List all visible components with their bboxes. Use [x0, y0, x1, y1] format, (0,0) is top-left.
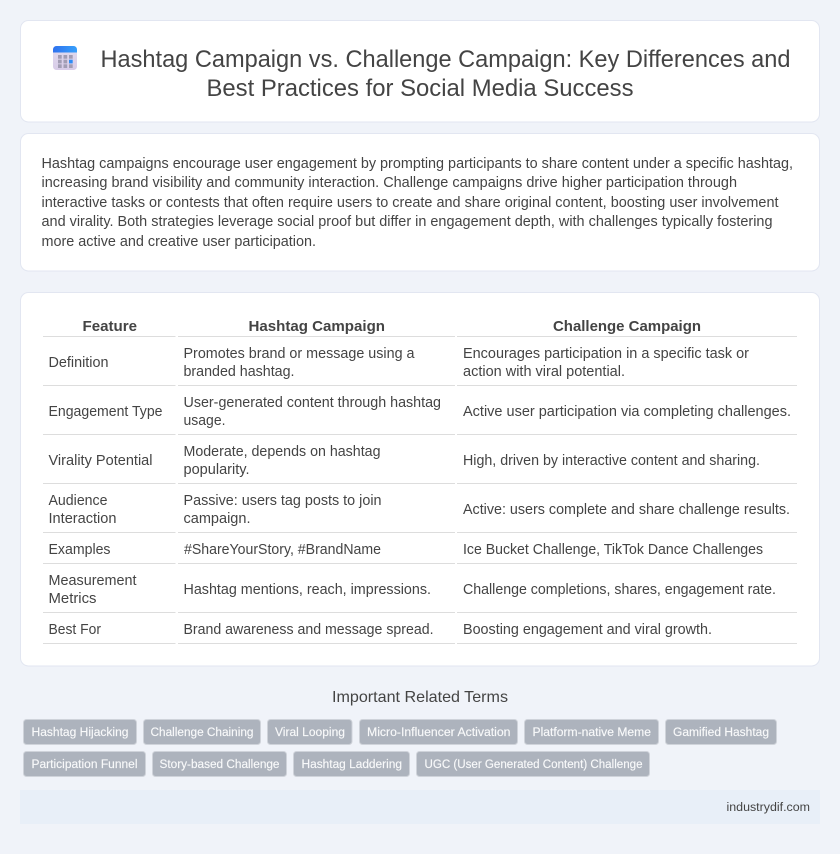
panel: introduction [20, 134, 820, 271]
tag: Gamified Hashtag [666, 720, 776, 744]
row: virality potential: Moderate, depends on hashtag [184, 444, 381, 460]
tag: Challenge Chaining [144, 720, 260, 744]
title: Hashtag Campaign vs. Challenge Campaign: Key Differences and [100, 46, 790, 73]
tag: UGC Challenge: UGC (User Generated Content) Challenge [424, 757, 643, 771]
table header row: Challenge Campaign [553, 318, 701, 335]
tag: Platform-native Meme: Platform-native Meme [532, 725, 651, 739]
table header row: Feature [82, 318, 137, 335]
heading: important related terms: Important Related Terms [332, 689, 508, 706]
table rules [43, 336, 797, 644]
row: engagement type: Active user participation via completing challenges. [463, 404, 791, 420]
row: audience interaction [48, 493, 790, 527]
tag: Gamified Hashtag: Gamified Hashtag [673, 725, 769, 739]
row: measurement metrics: Measurement [48, 573, 137, 589]
tag: Micro-Influencer Activation: Micro-Influencer Activation [367, 725, 510, 739]
footer source text: industrydif.com [726, 800, 810, 814]
row: definition: Promotes brand or message using a [184, 346, 415, 362]
row: virality potential [48, 444, 760, 478]
row: measurement metrics: Metrics [48, 591, 96, 607]
tag list: related terms [24, 720, 776, 776]
row: definition: branded hashtag. [184, 364, 294, 380]
row: measurement metrics: Challenge completions, shares, engagement rate. [463, 582, 776, 598]
row: virality potential: High, driven by interactive content and sharing. [463, 453, 760, 469]
row: definition: action with viral potential. [463, 364, 625, 380]
row: engagement type: Engagement Type [48, 404, 163, 420]
row: examples: #ShareYourStory, #BrandName [184, 542, 381, 558]
row: audience interaction: Active: users complete and share challenge results. [463, 502, 790, 518]
tag: Challenge Chaining: Challenge Chaining [150, 725, 254, 739]
tag: Viral Looping [268, 720, 352, 744]
row: engagement type: usage. [184, 413, 226, 429]
text block: introduction paragraph: Hashtag campaigns encourage user engagement by prompting participants to share content under a specific hashtag, [42, 156, 793, 172]
tag: Hashtag Laddering: Hashtag Laddering [302, 757, 402, 771]
panel: comparison table [20, 292, 820, 666]
tag: Hashtag Laddering [294, 752, 410, 776]
table header row [82, 318, 701, 335]
row: best for: Boosting engagement and viral growth. [463, 622, 712, 638]
row: examples: Ice Bucket Challenge, TikTok Dance Challenges [463, 542, 763, 558]
row: best for: Brand awareness and message spread. [184, 622, 434, 638]
row: virality potential: Virality Potential [48, 453, 152, 469]
row: measurement metrics [48, 573, 776, 607]
tag: Viral Looping: Viral Looping [275, 725, 345, 739]
title: Best Practices for Social Media Success [206, 75, 634, 102]
row: engagement type [48, 395, 791, 429]
text block: introduction paragraph: interactive tasks or contests that often require users to create and share original content, boosting user involvement [42, 195, 778, 211]
row: definition: Definition [48, 355, 109, 371]
icon: calendar [53, 46, 77, 70]
tag: Hashtag Hijacking: Hashtag Hijacking [32, 725, 128, 739]
row: audience interaction: Interaction [48, 511, 117, 527]
row: examples [48, 542, 763, 558]
footer [20, 790, 820, 824]
row: definition [48, 346, 749, 380]
row: audience interaction: campaign. [184, 511, 250, 527]
tag: Participation Funnel [24, 752, 146, 776]
text block: introduction paragraph [42, 156, 793, 250]
row: best for [48, 622, 712, 638]
tag: Participation Funnel: Participation Funnel [32, 757, 138, 771]
row: audience interaction: Audience [48, 493, 108, 509]
row: audience interaction: Passive: users tag posts to join [184, 493, 382, 509]
tag: Platform-native Meme [524, 720, 658, 744]
tag: UGC Challenge [416, 752, 650, 776]
row: best for: Best For [48, 622, 101, 638]
tag: Story-based Challenge: Story-based Challenge [160, 757, 280, 771]
title [100, 46, 790, 102]
row: measurement metrics: Hashtag mentions, reach, impressions. [184, 582, 431, 598]
table header row: Hashtag Campaign [248, 318, 385, 335]
text block: introduction paragraph: and virality. Both strategies leverage social proof but differ in engagement depth, with challenges typically fostering [42, 214, 772, 230]
tag: Story-based Challenge [152, 752, 286, 776]
panel: title header [20, 20, 820, 122]
tag: Hashtag Hijacking [24, 720, 136, 744]
row: engagement type: User-generated content through hashtag [184, 395, 441, 411]
row: virality potential: popularity. [184, 462, 250, 478]
text block: introduction paragraph: more active and creative user participation. [42, 234, 316, 250]
text block: introduction paragraph: increasing brand visibility and community interaction. Challenge campaigns drive higher participation through [42, 175, 737, 191]
row: definition: Encourages participation in a specific task or [463, 346, 749, 362]
row: examples: Examples [48, 542, 110, 558]
tag: Micro-Influencer Activation [360, 720, 518, 744]
